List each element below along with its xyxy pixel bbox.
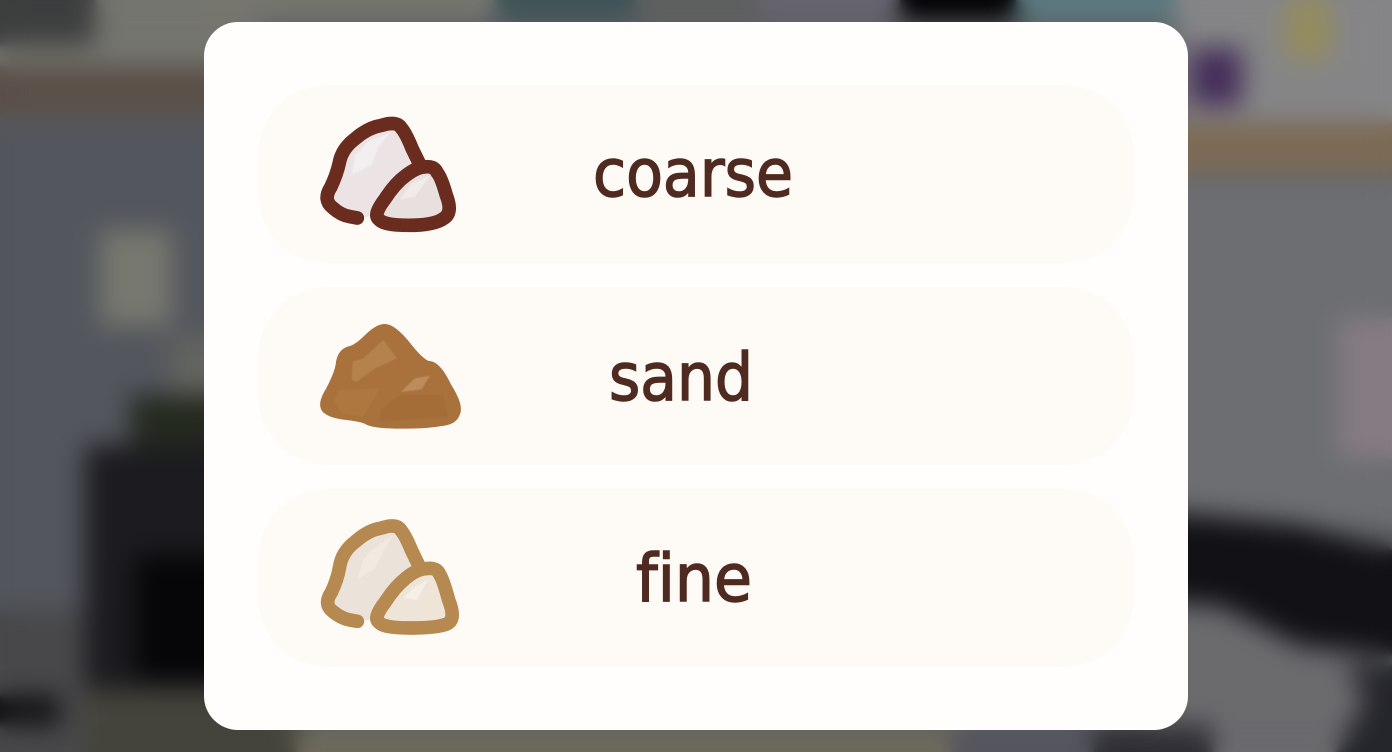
icon: coarse rocks: [326, 123, 449, 225]
icon: fine rocks: [327, 525, 452, 628]
label: coarse: coarse: [593, 135, 793, 212]
label: sand: sand: [609, 339, 753, 416]
panel: white card: [204, 22, 1188, 730]
icon: sand pile: [326, 329, 456, 423]
label: fine: fine: [636, 540, 752, 617]
row: fine: [258, 489, 1134, 667]
row: coarse: [258, 85, 1134, 263]
row: sand: [258, 287, 1134, 465]
